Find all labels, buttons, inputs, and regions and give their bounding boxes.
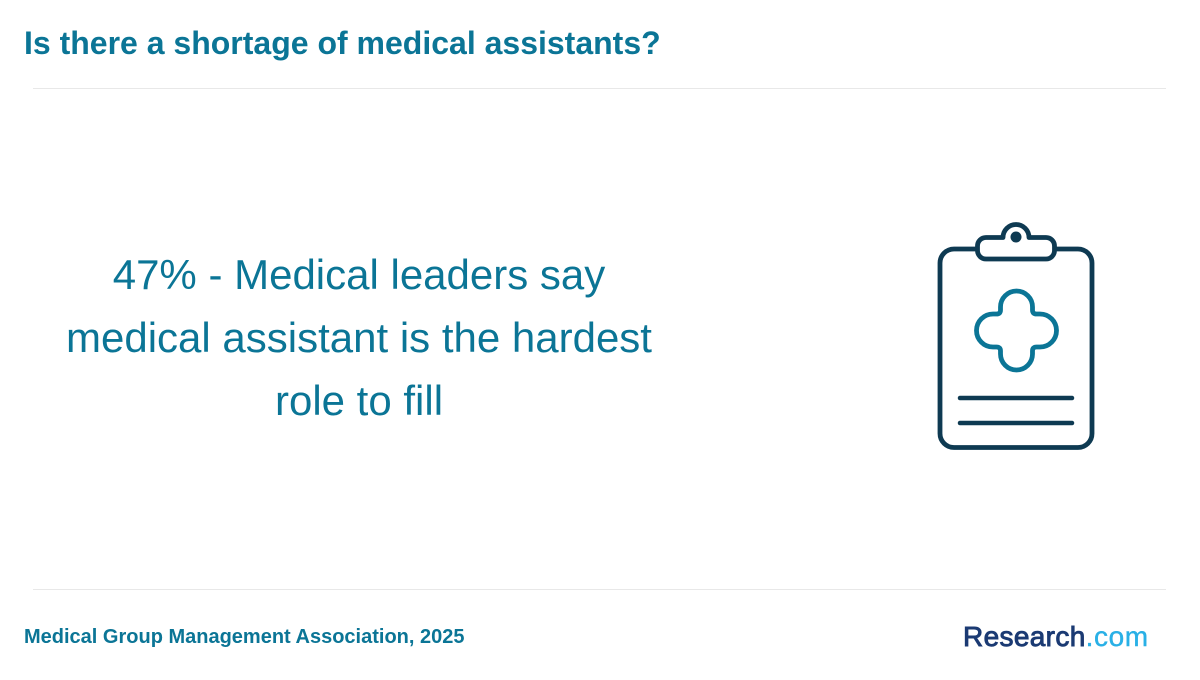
clip hole: [1010, 232, 1022, 242]
statistic text: role to fill: [275, 377, 443, 424]
text line 2: [960, 421, 1072, 425]
logo: Research.com: [963, 621, 1149, 652]
statistic text: [66, 251, 652, 424]
text line 1: [960, 396, 1072, 400]
clipboard board: [940, 249, 1092, 448]
source: Medical Group Management Association, 2025: [24, 626, 464, 648]
medical cross: [976, 291, 1056, 370]
clipboard clip: [978, 225, 1054, 259]
statistic text: medical assistant is the hardest: [66, 314, 652, 361]
title: Is there a shortage of medical assistants?: [24, 25, 661, 61]
statistic text: 47% - Medical leaders say: [113, 251, 605, 298]
